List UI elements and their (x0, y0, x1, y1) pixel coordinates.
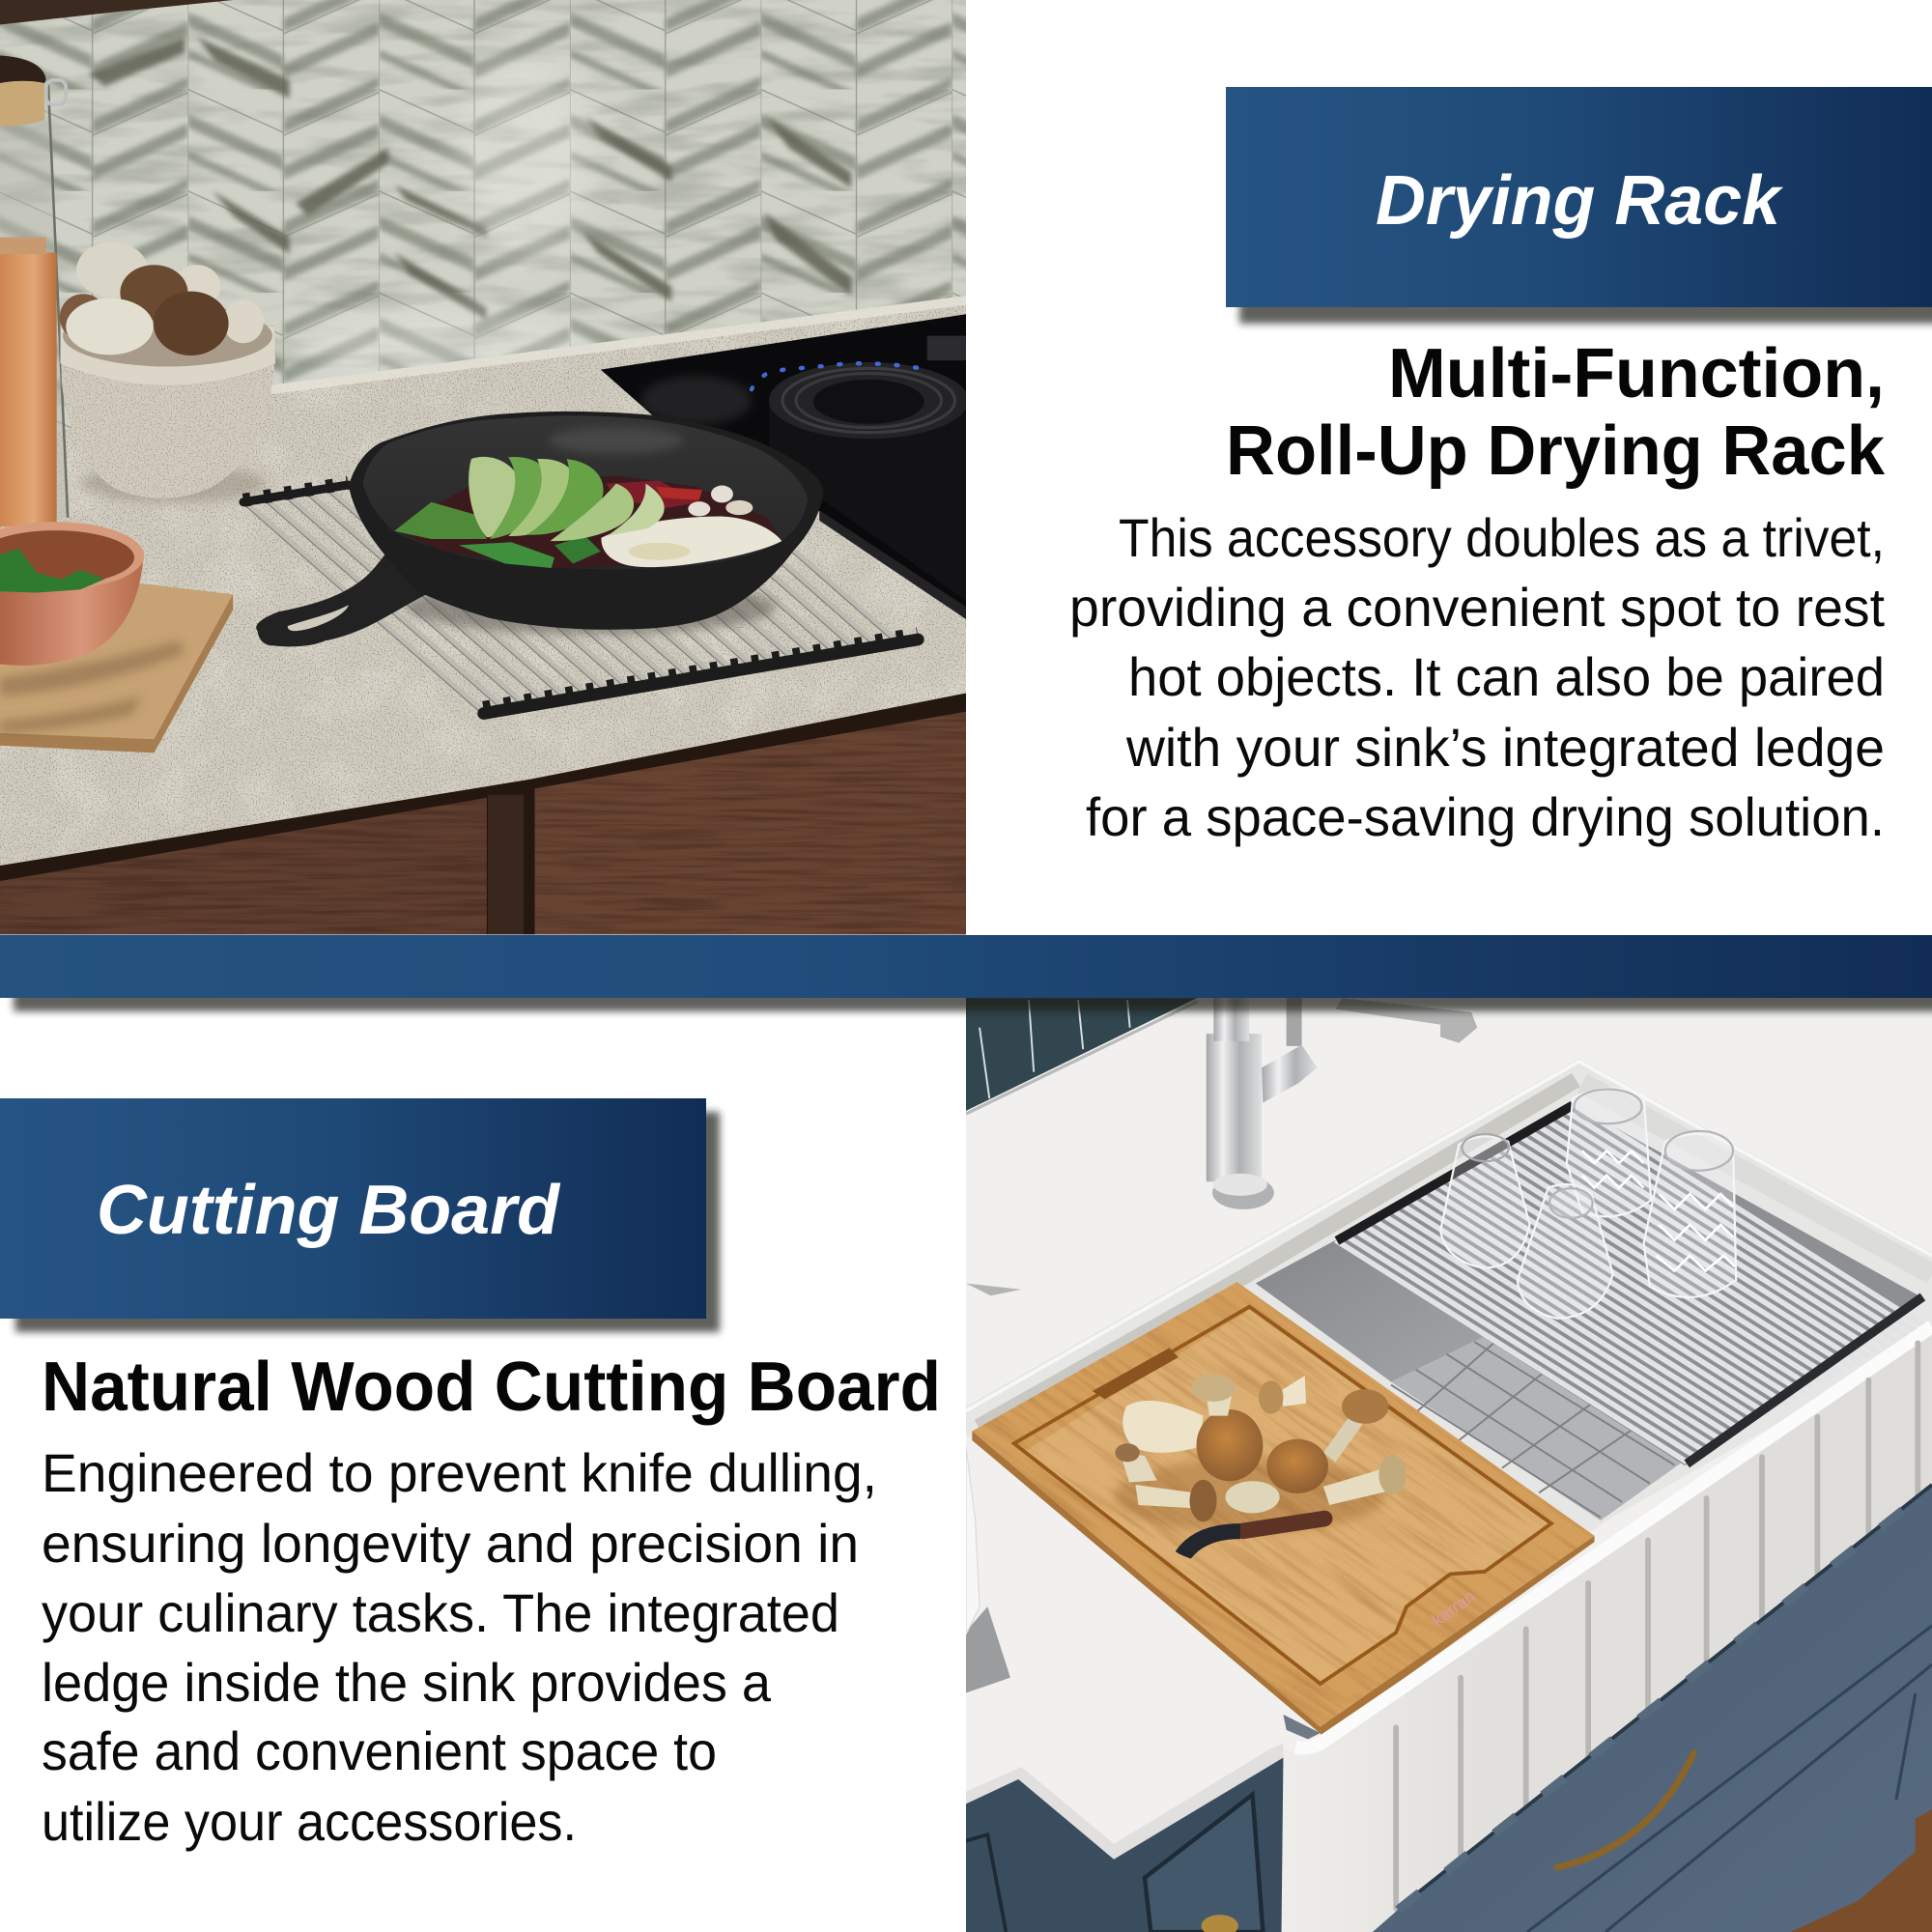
brushed faucet (1207, 998, 1477, 1209)
eggs and stone bowl (55, 242, 277, 505)
folded towel (966, 1606, 1010, 1693)
chevron tile backsplash (0, 0, 966, 443)
copper bowl with herbs (0, 522, 144, 666)
panel: cutting board (0, 1098, 941, 1852)
wood floor (1791, 1809, 1932, 1932)
marble vein (966, 1283, 1021, 1295)
left blue cabinet door (966, 1758, 1283, 1932)
text block: cutting board description: utilize your accessories. (42, 1791, 577, 1852)
dark basin wall (1256, 1240, 1492, 1381)
text block: drying rack description: hot objects. It can also be paired (1128, 646, 1885, 707)
countertop (0, 290, 966, 868)
cast iron skillet (256, 412, 824, 646)
blue divider band with shadow (0, 935, 1932, 1011)
heading: multi-function roll-up drying rack (1226, 335, 1886, 490)
bamboo cutting board: karran (1429, 1586, 1479, 1630)
sink rim (966, 1059, 1932, 1730)
wood cabinet doors (0, 693, 967, 936)
drying rack rods and rails (239, 476, 924, 720)
banner: drying rack: Drying Rack (1376, 162, 1784, 240)
heading: multi-function roll-up drying rack: Multi-Function, (1388, 335, 1885, 412)
glass at edge (966, 1446, 980, 1634)
text block: cutting board description: ensuring longevity and precision in (42, 1513, 859, 1574)
blue drawer cabinet (1373, 1485, 1932, 1932)
white marble counter (966, 1009, 1932, 1843)
sink shadow edge (1283, 1715, 1321, 1739)
drinking glasses (1440, 1089, 1736, 1319)
panel: drying rack (1069, 87, 1932, 847)
banner: cutting board: Cutting Board (97, 1172, 561, 1249)
fluted apron front (1273, 1326, 1932, 1932)
text block: drying rack description: providing a convenient spot to rest (1069, 577, 1885, 638)
dark shelf edge (0, 0, 233, 25)
bamboo cutting board (711, 898, 1922, 1932)
dark blue wall tile (966, 998, 1197, 1114)
text block: drying rack description (1069, 507, 1885, 847)
photo: farmhouse sink with cutting board (966, 998, 1932, 1932)
text block: cutting board description (42, 1442, 877, 1852)
olive wood board (0, 582, 233, 753)
skillet food (394, 457, 781, 568)
left counter edge (966, 1744, 1283, 1860)
banner: drying rack (1226, 87, 1932, 324)
heading: multi-function roll-up drying rack: Roll-Up Drying Rack (1226, 412, 1886, 490)
banner: cutting board (0, 1098, 720, 1332)
mushrooms and knife (1114, 1375, 1406, 1559)
text block: drying rack description: This accessory doubles as a trivet, (1119, 507, 1885, 568)
photo: skillet on drying rack (0, 0, 969, 936)
jar with orange liquid (0, 55, 68, 526)
heading: natural wood cutting board: Natural Wood Cutting Board (42, 1349, 941, 1426)
text block: cutting board description: your culinary tasks. The integrated (42, 1582, 839, 1643)
text block: cutting board description: Engineered to prevent knife dulling, (42, 1442, 877, 1503)
basin bottom grid (1391, 1332, 1687, 1520)
cooktop (601, 314, 969, 619)
text block: cutting board description: ledge inside the sink provides a (42, 1652, 772, 1713)
text block: cutting board description: safe and convenient space to (42, 1720, 717, 1781)
gold drawer handle (1557, 1753, 1693, 1867)
text block: drying rack description: with your sink’s integrated ledge (1125, 717, 1885, 778)
text block: drying rack description: for a space-saving drying solution. (1086, 786, 1885, 847)
roll-up rack in sink (1334, 1104, 1924, 1465)
